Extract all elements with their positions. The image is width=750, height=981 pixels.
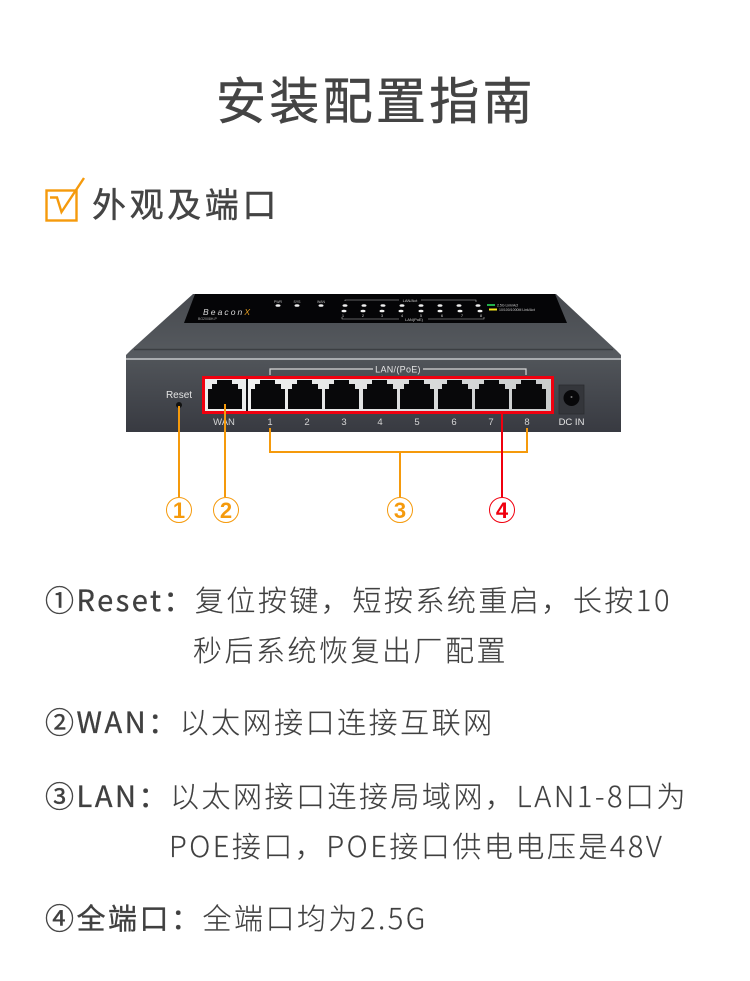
icon: orange checkbox bbox=[45, 177, 85, 222]
switch LED panel bbox=[184, 294, 567, 323]
red highlight box bbox=[204, 378, 552, 412]
switch LED panel: SYS bbox=[293, 300, 301, 304]
port labels: 8 bbox=[524, 417, 530, 428]
port labels: 5 bbox=[414, 417, 420, 428]
callout 1 bbox=[166, 406, 192, 523]
item 4: ④全端口：全端口均为2.5G bbox=[45, 896, 428, 938]
DC power jack bbox=[559, 385, 585, 428]
item 3 label and description: ③LAN：以太网接口连接局域网，LAN1-8口为 bbox=[45, 774, 688, 816]
port labels: 3 bbox=[341, 417, 347, 428]
switch LED panel: 6 bbox=[441, 313, 444, 318]
callout 4: 4 bbox=[496, 498, 509, 523]
switch LED panel: LAN(PoE) bbox=[405, 317, 424, 322]
callout 1: 1 bbox=[173, 498, 185, 523]
switch LED panel: 8 bbox=[480, 313, 483, 318]
callout 2 bbox=[214, 404, 238, 523]
callout 2: 2 bbox=[220, 498, 232, 523]
item 1 second line: 秒后系统恢复出厂配置 bbox=[193, 628, 508, 670]
reset button: Reset bbox=[166, 390, 192, 401]
port labels: 1 bbox=[267, 417, 273, 428]
switch LED panel: BeaconX bbox=[203, 307, 250, 317]
item 2: ②WAN：以太网接口连接互联网 bbox=[45, 700, 495, 742]
port labels: 4 bbox=[377, 417, 383, 428]
item 3 second line: POE接口，POE接口供电电压是48V bbox=[169, 824, 664, 866]
DC power jack: DC IN bbox=[559, 417, 585, 428]
section heading: 外观及端口 bbox=[92, 178, 280, 227]
switch LED panel: 2.5G Link/Act bbox=[497, 304, 518, 308]
callout 3 bbox=[270, 428, 527, 523]
port labels: WAN bbox=[213, 417, 235, 428]
switch LED panel: 10/100/1000M Link/Act bbox=[499, 308, 535, 312]
port strip bbox=[202, 376, 554, 414]
LAN bracket label: LAN/(PoE) bbox=[375, 364, 421, 374]
LAN bracket label bbox=[270, 364, 526, 375]
switch LED panel: PWR bbox=[274, 300, 283, 304]
reset button bbox=[166, 390, 192, 408]
port labels: 2 bbox=[304, 417, 310, 428]
switch LED panel: 2 bbox=[362, 313, 365, 318]
switch LED panel: 4 bbox=[401, 313, 404, 318]
switch LED panel: 3 bbox=[381, 313, 384, 318]
switch diagram bbox=[126, 294, 621, 523]
switch LED panel: 1 bbox=[342, 313, 345, 318]
port labels: 7 bbox=[488, 417, 494, 428]
switch LED panel: WAN bbox=[317, 300, 325, 304]
switch LED panel: BG2008H-P bbox=[198, 317, 218, 321]
callout 4 bbox=[490, 414, 514, 523]
switch front panel bbox=[126, 360, 621, 432]
title: 安装配置指南 bbox=[216, 62, 536, 134]
item 1 label and description: ①Reset：复位按键，短按系统重启，长按10 bbox=[45, 578, 672, 620]
switch LED panel: 5 bbox=[420, 313, 423, 318]
switch LED panel: LAN/Act bbox=[403, 298, 418, 303]
switch LED panel: 7 bbox=[461, 313, 464, 318]
callout 3: 3 bbox=[394, 498, 406, 523]
switch top cover bbox=[126, 294, 621, 360]
port labels bbox=[213, 417, 530, 428]
port labels: 6 bbox=[451, 417, 457, 428]
